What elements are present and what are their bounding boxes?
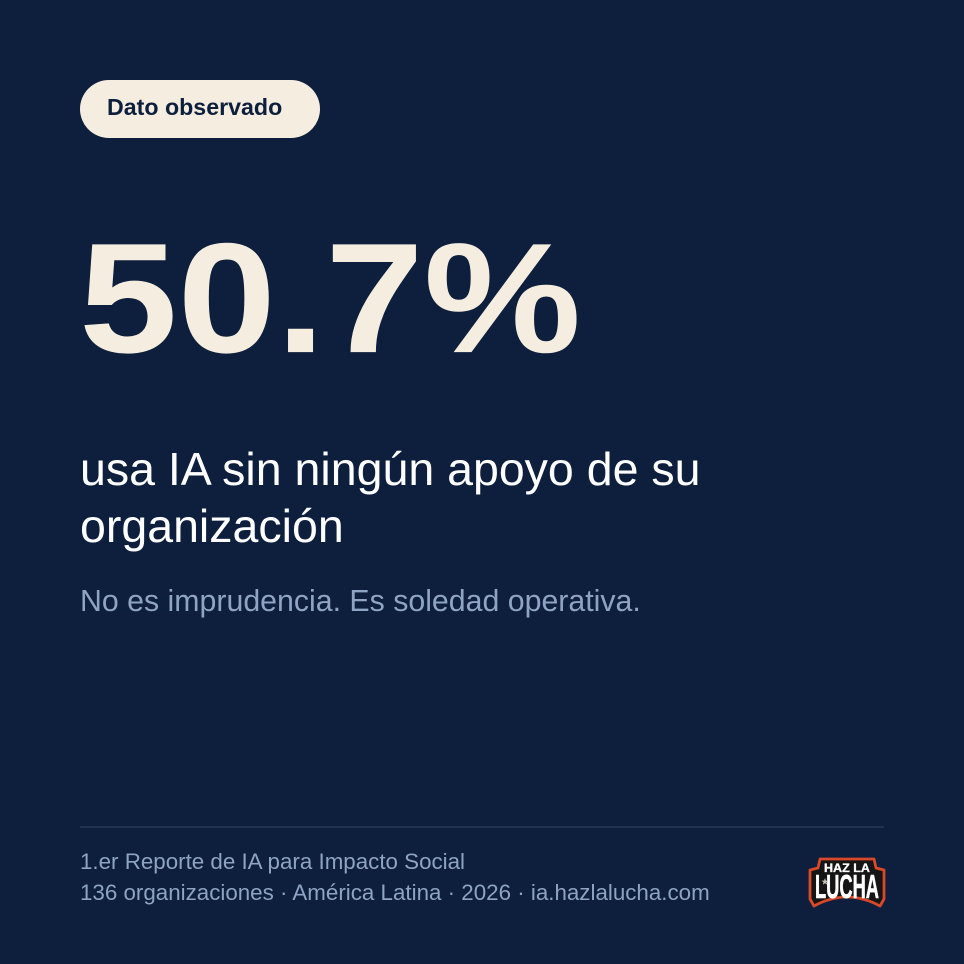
headline text: organización [80,500,344,552]
logo: Haz la Lucha [808,858,886,908]
footer credits [80,849,710,905]
logo: Haz la Lucha: HAZ LA [824,863,870,875]
headline text: usa IA sin ningún apoyo de su [80,443,700,495]
big number: 50.7% [79,211,581,386]
footer credits: 136 organizaciones · América Latina · 2026 · ia.hazlalucha.com [80,880,710,905]
footer credits: 1.er Reporte de IA para Impacto Social [80,849,465,874]
footer divider [80,826,884,828]
badge: Dato observado [80,80,320,138]
supporting text: No es imprudencia. Es soledad operativa. [80,585,641,618]
badge: Dato observado: Dato observado [107,94,282,120]
headline text [80,443,700,552]
